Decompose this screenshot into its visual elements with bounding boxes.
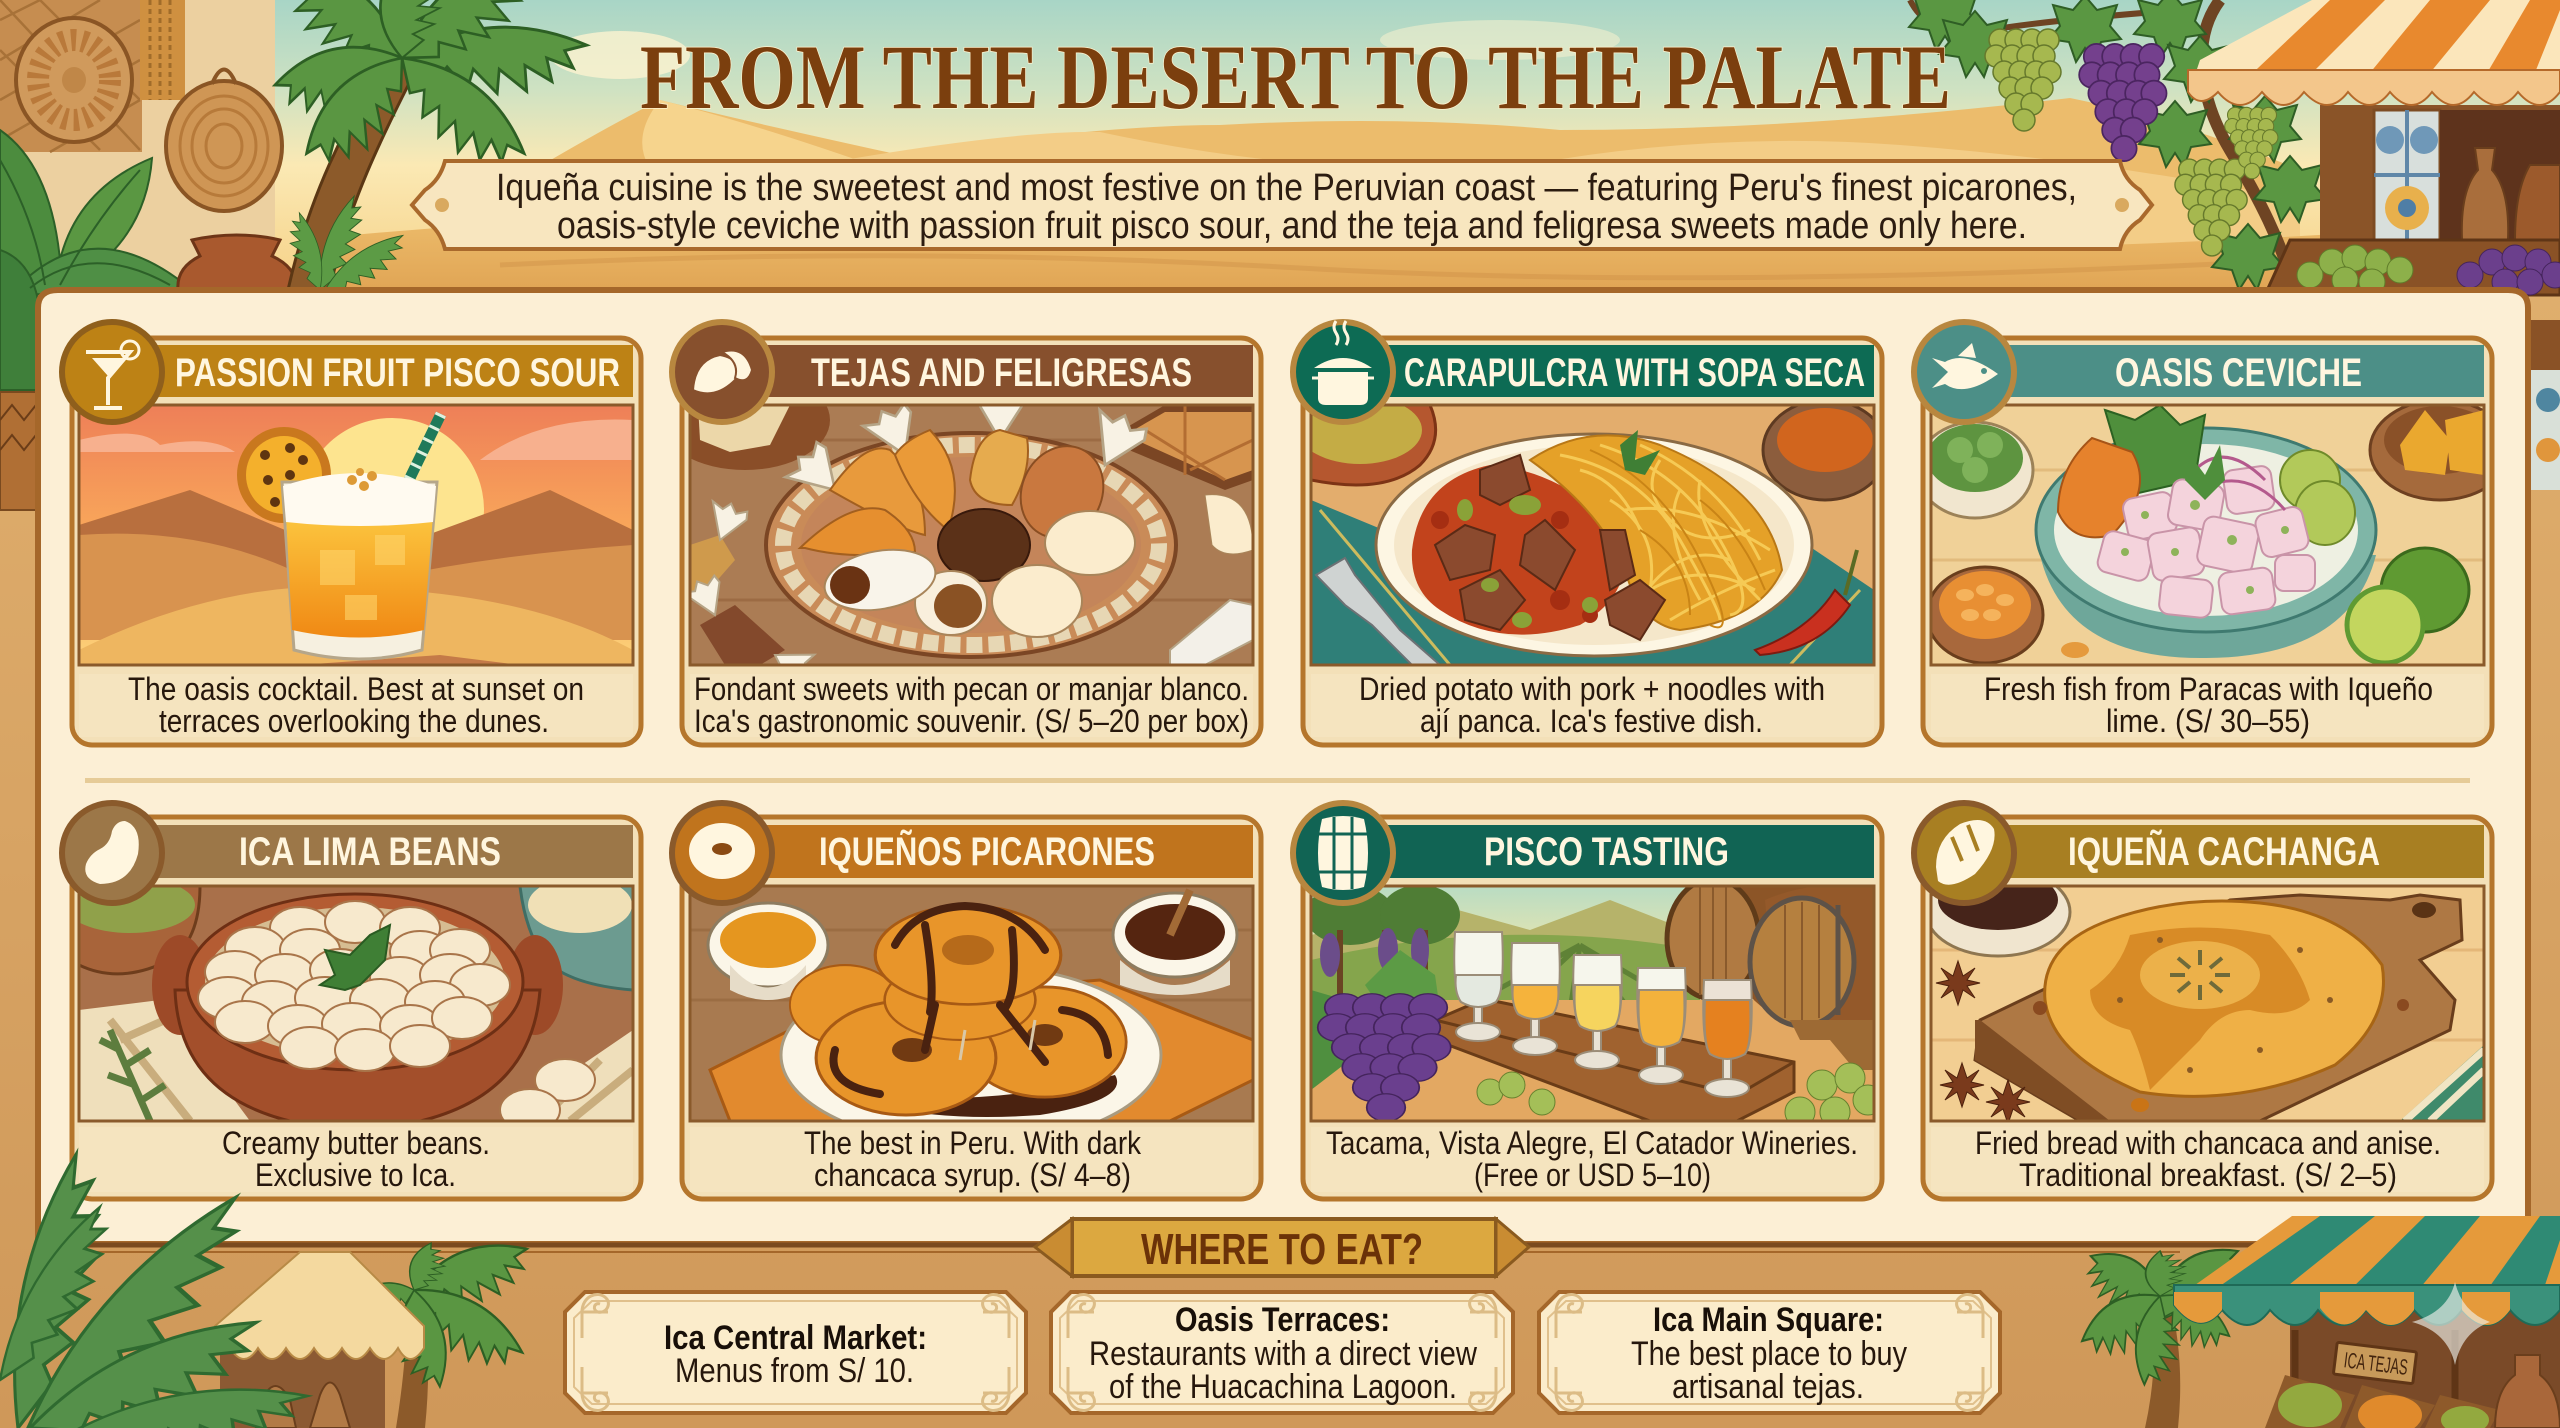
caption <box>79 1125 633 1193</box>
caption: terraces overlooking the dunes. <box>159 703 549 739</box>
card: iquena cachanga <box>1914 803 2492 1199</box>
info box: oasis terraces: of the Huacachina Lagoon. <box>1109 1368 1457 1406</box>
illustration: picarones with syrup <box>692 888 1252 1120</box>
illustration: pot of lima beans <box>80 888 632 1120</box>
main cream panel <box>38 290 2528 1252</box>
decoration: vine with grapes <box>1909 0 2326 290</box>
caption: Tacama, Vista Alegre, El Catador Wineries. <box>1326 1125 1858 1161</box>
heading: CARAPULCRA WITH SOPA SECA <box>1404 351 1865 395</box>
info box: ica main square <box>1539 1292 2000 1413</box>
caption: Dried potato with pork + noodles with <box>1359 671 1825 707</box>
caption: Fried bread with chancaca and anise. <box>1975 1125 2441 1161</box>
caption: lime. (S/ 30–55) <box>2106 703 2310 739</box>
header band <box>79 345 633 397</box>
decoration: sparkle watermark <box>2412 1282 2490 1365</box>
caption <box>1311 1125 1874 1193</box>
header band <box>690 825 1253 878</box>
heading: OASIS CEVICHE <box>2115 351 2362 395</box>
info box: oasis terraces: Oasis Terraces: <box>1175 1301 1390 1339</box>
caption <box>1931 1125 2484 1193</box>
caption <box>1931 671 2484 739</box>
header band <box>1931 345 2484 397</box>
card: pisco tasting <box>1293 803 1883 1199</box>
caption: The oasis cocktail. Best at sunset on <box>128 671 584 707</box>
subtitle banner: oasis-style ceviche with passion fruit pisco sour, and the teja and feligresa sweets made only here. <box>557 205 2027 247</box>
caption: Traditional breakfast. (S/ 2–5) <box>2019 1157 2397 1193</box>
decoration: left potted plant <box>0 130 192 510</box>
icon: bread <box>1914 803 2014 903</box>
icon: fish <box>1914 322 2014 422</box>
subtitle banner: Iqueña cuisine is the sweetest and most festive on the Peruvian coast — featuring Peru's finest picarones, <box>496 167 2077 209</box>
heading: IQUEÑOS PICARONES <box>819 828 1155 874</box>
caption: ají panca. Ica's festive dish. <box>1420 703 1763 739</box>
caption: The best in Peru. With dark <box>804 1125 1142 1161</box>
card: tejas and feligresas <box>660 322 1261 745</box>
section heading: where to eat <box>1035 1219 1529 1276</box>
info box: ica central market: Ica Central Market: <box>664 1319 927 1357</box>
caption <box>690 1125 1253 1193</box>
subtitle banner <box>412 161 2152 249</box>
caption: (Free or USD 5–10) <box>1474 1157 1711 1193</box>
caption <box>690 671 1253 739</box>
caption <box>1311 671 1874 739</box>
caption: Ica's gastronomic souvenir. (S/ 5–20 per box) <box>694 703 1249 739</box>
icon: lima bean <box>62 803 162 903</box>
icon: barrel <box>1293 803 1393 903</box>
illustration: ceviche bowl <box>1932 406 2482 664</box>
info box: ica main square: artisanal tejas. <box>1672 1368 1864 1406</box>
decoration: top right market stall <box>2188 0 2560 295</box>
decoration: right edge tiles <box>2525 320 2560 490</box>
title: FROM THE DESERT TO THE PALATE <box>640 26 1951 128</box>
illustration: stew and noodles plate <box>1298 396 1887 665</box>
header band <box>1311 345 1874 397</box>
header band <box>1931 825 2484 878</box>
info box: ica central market: Menus from S/ 10. <box>675 1352 914 1390</box>
header band <box>1311 825 1874 878</box>
caption <box>79 671 633 739</box>
stall sign <box>2333 1342 2417 1384</box>
info box: ica main square: The best place to buy <box>1631 1335 1907 1373</box>
caption: Fresh fish from Paracas with Iqueño <box>1984 671 2433 707</box>
card: carapulcra with sopa seca <box>1293 321 1887 745</box>
card: oasis ceviche <box>1914 322 2510 745</box>
icon: cooking pot <box>1293 321 1393 422</box>
caption: Fondant sweets with pecan or manjar blanco. <box>694 671 1249 707</box>
heading: IQUEÑA CACHANGA <box>2068 828 2380 874</box>
caption: Exclusive to Ica. <box>255 1157 456 1193</box>
decoration: left wall with baskets <box>0 0 282 290</box>
illustration: plate of sweets <box>692 406 1252 664</box>
decoration: bottom left palms and tent <box>0 1149 538 1428</box>
card: iquenos picarones <box>672 803 1261 1199</box>
heading: PISCO TASTING <box>1484 830 1729 874</box>
card: ica lima beans <box>62 803 641 1199</box>
info box: oasis terraces <box>1051 1292 1513 1413</box>
decoration: terracotta jar <box>178 235 296 290</box>
caption: chancaca syrup. (S/ 4–8) <box>814 1157 1131 1193</box>
info box: ica main square: Ica Main Square: <box>1653 1301 1884 1339</box>
decoration: top left palm tree <box>269 0 589 305</box>
info box: ica central market <box>565 1292 1026 1413</box>
header band <box>79 825 633 878</box>
decoration: bottom right palm and market stall <box>2073 1216 2560 1428</box>
section heading: where to eat: WHERE TO EAT? <box>1141 1225 1423 1274</box>
icon: donut <box>672 803 772 903</box>
illustration: pisco flight in vineyard <box>1305 879 1883 1127</box>
heading: ICA LIMA BEANS <box>239 830 501 874</box>
illustration: cocktail at desert sunset <box>79 405 633 665</box>
stall sign: ICA TEJAS <box>2343 1347 2409 1380</box>
icon: fondant sweets <box>672 322 772 422</box>
illustration: cachanga on board <box>1932 888 2482 1120</box>
heading: PASSION FRUIT PISCO SOUR <box>175 351 620 395</box>
icon: martini <box>62 322 162 422</box>
card: passion fruit pisco sour <box>62 322 641 745</box>
info box: oasis terraces: Restaurants with a direct view <box>1089 1335 1477 1373</box>
heading: TEJAS AND FELIGRESAS <box>811 351 1192 395</box>
header band <box>690 345 1253 397</box>
caption: Creamy butter beans. <box>222 1125 490 1161</box>
